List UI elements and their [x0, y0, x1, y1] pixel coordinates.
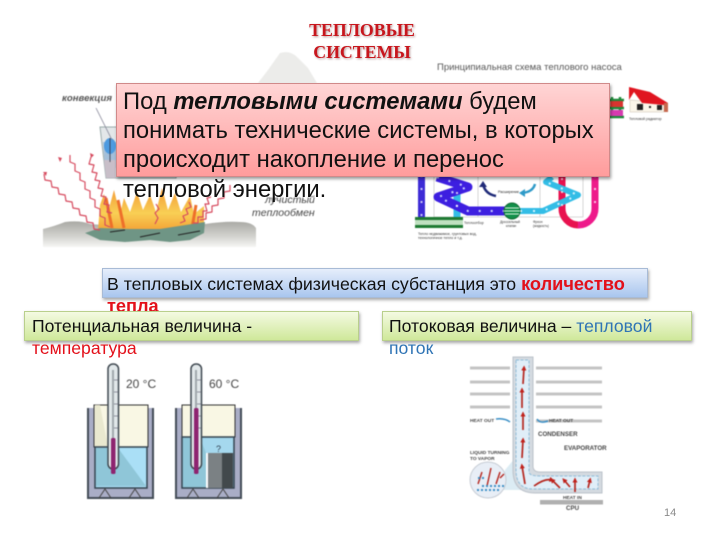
illustration: heat pump schematic: Расширение: [498, 190, 519, 194]
illustration: heat pipe on CPU: HEAT OUT: [549, 418, 573, 424]
illustration: heat pipe on CPU: CONDENSER: [538, 431, 578, 438]
text: тепловой энергии.: [123, 176, 326, 203]
text: тепла: [107, 296, 159, 316]
page number: 14: [664, 507, 676, 519]
illustration: heat pipe on CPU: HEAT OUT: [470, 418, 494, 424]
callout: definition of thermal systems: Под тепловыми системами будем: [123, 88, 537, 115]
illustration: heat pipe on CPU: TO VAPOR: [470, 456, 495, 462]
callout: flow quantity: Потоковая величина – тепловой: [389, 316, 652, 336]
illustration: fire heating pot: лучистый: [264, 194, 315, 206]
text: поток: [389, 338, 433, 358]
callout: potential quantity: Потенциальная величина -: [32, 316, 252, 336]
illustration: heat pump schematic: Теплоотбор: [464, 221, 484, 225]
illustration: heat pipe on CPU: CPU: [566, 505, 580, 512]
illustration: heat pump schematic: Принципиальная схема теплового насоса: [437, 62, 623, 73]
illustration: heat pump schematic: Тепло недвижимое, грунтовых вод,: [418, 232, 477, 236]
illustration: heat pipe on CPU: LIQUID TURNING: [470, 450, 510, 456]
illustration: heat pipe on CPU: EVAPORATOR: [564, 445, 607, 452]
illustration: heat pump schematic: клапан: [506, 224, 517, 228]
illustration: heat pipe on CPU: HEAT IN: [563, 495, 582, 501]
illustration: heat pump schematic: Тепловой радиатор: [629, 117, 662, 121]
callout: physical substance: [102, 268, 648, 298]
callout: definition of thermal systems: [116, 83, 610, 177]
title: СИСТЕМЫ: [313, 42, 411, 62]
illustration: thermometers in calorimeters: 20 °C: [126, 377, 156, 391]
illustration: heat pump schematic: Фреон: [533, 220, 543, 224]
title: ТЕПЛОВЫЕ: [309, 20, 415, 40]
illustration: fire heating pot: теплообмен: [252, 207, 315, 219]
callout: definition of thermal systems: происходит накопление и перенос: [123, 146, 504, 173]
illustration: heat pump schematic: (жидкость): [533, 224, 549, 228]
illustration: thermometers in calorimeters: 60 °C: [209, 377, 239, 391]
illustration: thermometers in calorimeters: ?: [216, 444, 221, 454]
title: [309, 20, 416, 62]
callout: physical substance: В тепловых системах физическая субстанция это количество: [107, 274, 625, 294]
illustration: heat pump schematic: технологичное тепло и т.д.: [418, 236, 463, 240]
callout: definition of thermal systems: понимать технические системы, в которых: [123, 117, 594, 144]
callout: potential quantity: [24, 311, 359, 341]
text: температура: [32, 338, 137, 358]
illustration: heat pump schematic: Дроссельный: [500, 220, 520, 224]
callout: flow quantity: [382, 311, 692, 341]
illustration: fire heating pot: конвекция: [62, 93, 112, 104]
